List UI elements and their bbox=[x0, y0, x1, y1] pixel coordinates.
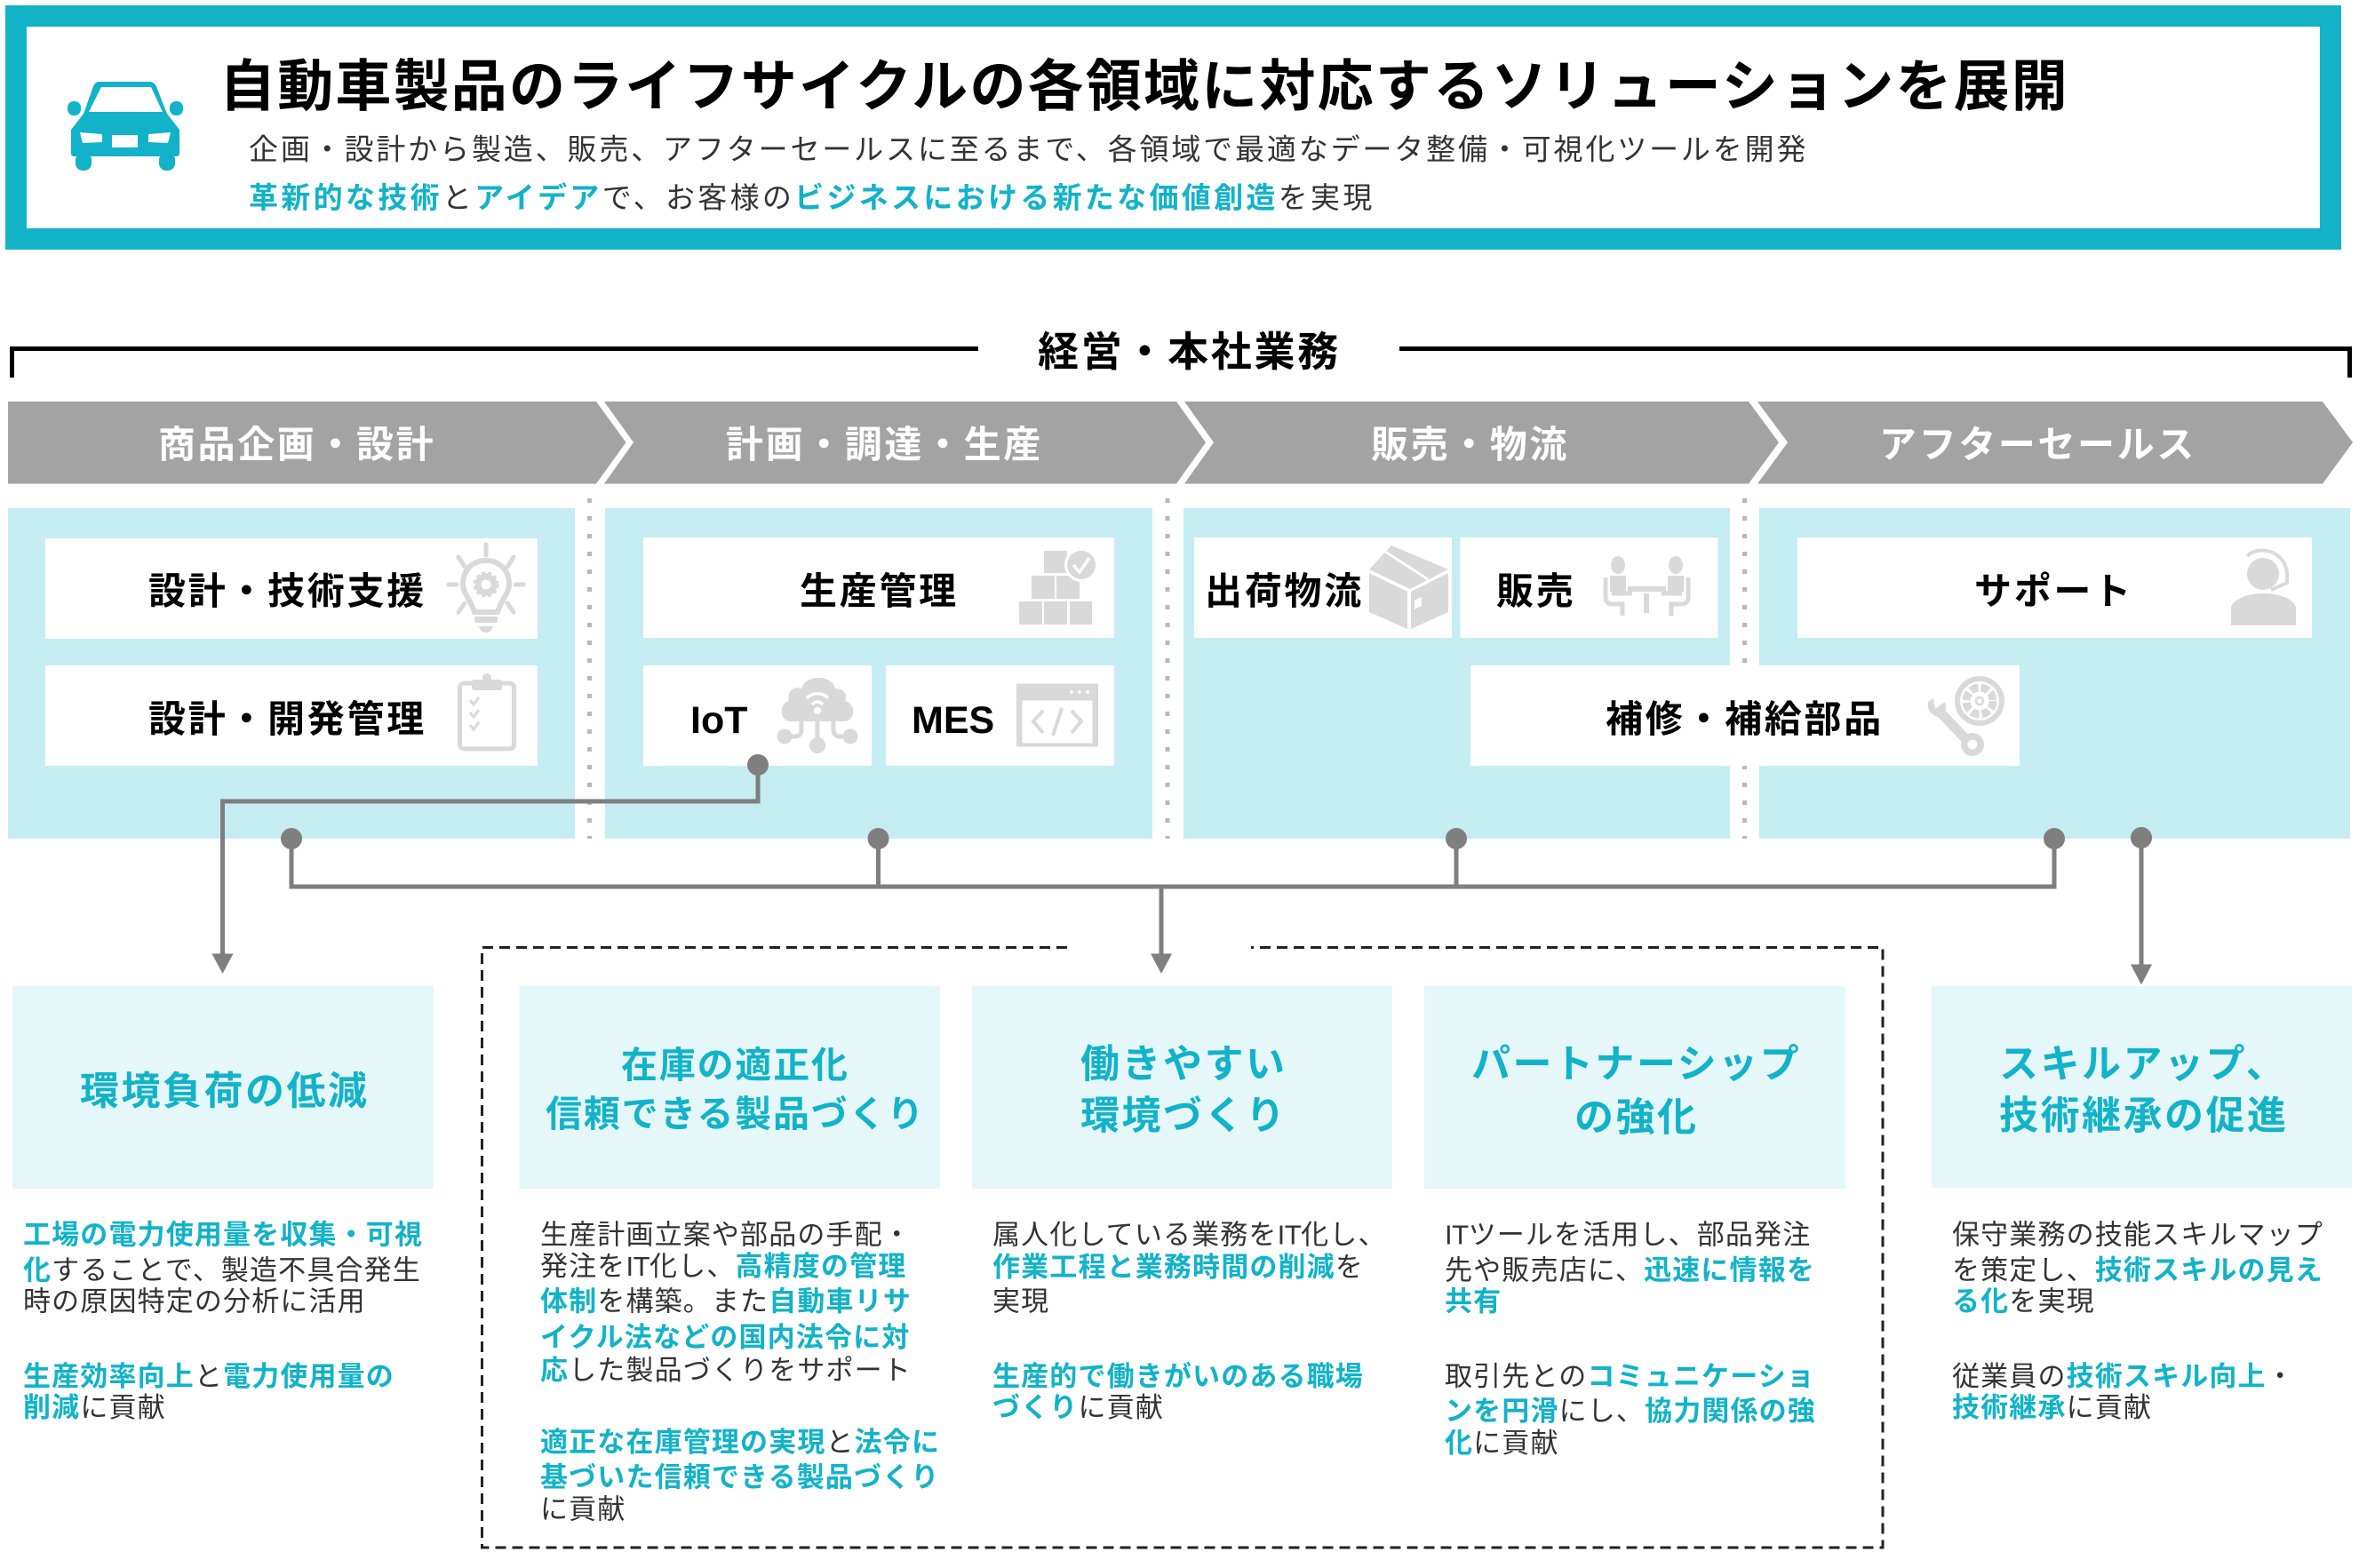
description: を策定し、技術スキルの見え bbox=[1952, 1254, 2323, 1286]
description: 技術継承に貢献 bbox=[1952, 1392, 2152, 1423]
title: 自動車製品のライフサイクルの各領域に対応するソリューションを展開 bbox=[219, 56, 2069, 118]
column: 在庫の適正化 bbox=[519, 986, 940, 1524]
icon: light bulb bbox=[449, 545, 523, 633]
arrow: 販売・物流: 販売・物流 bbox=[1371, 424, 1569, 466]
value chain arrows bbox=[8, 402, 2353, 483]
arrow: 商品企画・設計: 商品企画・設計 bbox=[158, 424, 435, 466]
goal heading box bbox=[519, 986, 940, 1189]
connector: value chain to central goals bbox=[281, 828, 2065, 974]
bracket: corporate operations: 経営・本社業務 bbox=[1038, 329, 1341, 375]
description: 保守業務の技能スキルマップ bbox=[1952, 1219, 2323, 1251]
box: 補修・補給部品: 補修・補給部品 bbox=[1606, 698, 1884, 740]
description: 実現 bbox=[992, 1286, 1049, 1317]
box: 生産管理 bbox=[643, 537, 1114, 638]
goal heading box: スキルアップ、 bbox=[1999, 1043, 2287, 1086]
description: 従業員の技術スキル向上・ bbox=[1952, 1361, 2295, 1392]
goal heading box: パートナーシップ bbox=[1471, 1043, 1801, 1086]
goal heading box: の強化 bbox=[1574, 1096, 1699, 1139]
column: 環境負荷の低減 bbox=[12, 986, 434, 1423]
connector: IoT to environment bbox=[211, 754, 769, 974]
description: 発注をIT化し、高精度の管理 bbox=[540, 1251, 906, 1282]
goal heading box bbox=[1424, 986, 1845, 1189]
icon: headset operator bbox=[2231, 551, 2296, 625]
box: 出荷物流 bbox=[1194, 537, 1452, 638]
goal heading box: 働きやすい bbox=[1080, 1043, 1287, 1086]
description bbox=[992, 1219, 1387, 1423]
icon: stacked boxes bbox=[1019, 548, 1098, 625]
description bbox=[540, 1219, 940, 1524]
icon: meeting bbox=[1606, 556, 1688, 616]
description: に貢献 bbox=[540, 1494, 626, 1524]
description: 生産計画立案や部品の手配・ bbox=[540, 1219, 912, 1251]
goal heading box: 技術継承の促進 bbox=[1999, 1094, 2289, 1137]
description bbox=[1952, 1219, 2323, 1423]
arrow: 販売・物流 bbox=[1184, 402, 1779, 483]
description: 適正な在庫管理の実現と法令に bbox=[540, 1427, 940, 1458]
box: サポート bbox=[1797, 537, 2312, 638]
description: 共有 bbox=[1445, 1286, 1502, 1317]
goal heading box: 環境負荷の低減 bbox=[80, 1070, 370, 1113]
description: 先や販売店に、迅速に情報を bbox=[1445, 1254, 1815, 1286]
goal heading box: 環境づくり bbox=[1080, 1094, 1287, 1137]
description: ンを円滑にし、協力関係の強 bbox=[1445, 1396, 1816, 1427]
box: 出荷物流: 出荷物流 bbox=[1205, 570, 1364, 612]
description bbox=[23, 1219, 423, 1423]
box: MES bbox=[886, 665, 1114, 766]
box: 販売: 販売 bbox=[1496, 570, 1575, 612]
goal heading box: 信頼できる製品づくり bbox=[546, 1094, 925, 1134]
goal heading box: 在庫の適正化 bbox=[621, 1045, 849, 1086]
panel: 販売・物流 bbox=[1184, 508, 1730, 839]
description: 削減に貢献 bbox=[23, 1392, 166, 1423]
description: 作業工程と業務時間の削減を bbox=[992, 1252, 1364, 1283]
description: 生産的で働きがいのある職場 bbox=[992, 1361, 1364, 1392]
goal heading box bbox=[12, 986, 434, 1189]
goal heading box bbox=[972, 986, 1392, 1189]
arrow: 計画・調達・生産: 計画・調達・生産 bbox=[726, 424, 1043, 466]
box: サポート: サポート bbox=[1974, 570, 2133, 612]
panel: 商品企画・設計 bbox=[8, 508, 575, 839]
description: 時の原因特定の分析に活用 bbox=[23, 1286, 366, 1317]
goal heading box bbox=[1932, 986, 2352, 1188]
box: 補修・補給部品 bbox=[1470, 665, 2020, 766]
box: 設計・開発管理 bbox=[45, 665, 538, 766]
description: 化に貢献 bbox=[1445, 1428, 1559, 1459]
connector: after-sales to skills bbox=[2131, 827, 2152, 984]
subtitle line 1: 企画・設計から製造、販売、アフターセールスに至るまで、各領域で最適なデータ整備・可視化ツールを開発 bbox=[249, 133, 1808, 165]
box: IoT: IoT bbox=[690, 699, 747, 742]
dashed group frame bbox=[482, 947, 1883, 1548]
column: 働きやすい環境づくり bbox=[972, 986, 1392, 1423]
description: づくりに貢献 bbox=[992, 1392, 1164, 1423]
description: 基づいた信頼できる製品づくり bbox=[540, 1462, 939, 1492]
column: スキルアップ、技術継承の促進 bbox=[1932, 986, 2352, 1423]
icon: clipboard bbox=[460, 673, 514, 749]
box: 設計・技術支援 bbox=[45, 538, 538, 639]
description: 生産効率向上と電力使用量の bbox=[23, 1361, 394, 1392]
icon: code window bbox=[1016, 684, 1098, 746]
arrow: 商品企画・設計 bbox=[8, 402, 626, 483]
icon: wrench and wheel bbox=[1928, 679, 2002, 756]
description: ITツールを活用し、部品発注 bbox=[1445, 1219, 1811, 1251]
subtitle line 2: 革新的な技術とアイデアで、お客様のビジネスにおける新たな価値創造を実現 bbox=[249, 181, 1375, 214]
icon: cloud network bbox=[777, 678, 858, 753]
panel: アフターセールス bbox=[1759, 508, 2350, 839]
description: 応した製品づくりをサポート bbox=[540, 1355, 912, 1386]
description: 取引先とのコミュニケーショ bbox=[1445, 1361, 1815, 1392]
panel: 計画・調達・生産 bbox=[605, 508, 1152, 839]
arrow: アフターセールス bbox=[1757, 402, 2353, 483]
box: 設計・開発管理: 設計・開発管理 bbox=[148, 698, 426, 740]
box: 販売 bbox=[1461, 537, 1718, 638]
bracket: corporate operations bbox=[12, 329, 2349, 378]
description: 体制を構築。また自動車リサ bbox=[540, 1286, 912, 1317]
description: 工場の電力使用量を収集・可視 bbox=[23, 1219, 423, 1251]
box: IoT bbox=[643, 665, 872, 766]
description: イクル法などの国内法令に対 bbox=[540, 1322, 910, 1353]
arrow: アフターセールス: アフターセールス bbox=[1879, 424, 2196, 466]
header banner bbox=[5, 5, 2341, 250]
description bbox=[1445, 1219, 1816, 1459]
icon: car bbox=[68, 82, 183, 171]
description: 化することで、製造不具合発生 bbox=[23, 1254, 421, 1286]
box: 設計・技術支援: 設計・技術支援 bbox=[148, 570, 426, 612]
arrow: 計画・調達・生産 bbox=[604, 402, 1206, 483]
icon: cardboard box bbox=[1369, 545, 1448, 629]
column: パートナーシップの強化 bbox=[1424, 986, 1845, 1459]
description: 属人化している業務をIT化し、 bbox=[992, 1219, 1387, 1251]
description: る化を実現 bbox=[1952, 1286, 2095, 1317]
box: MES: MES bbox=[912, 699, 994, 742]
box: 生産管理: 生産管理 bbox=[800, 570, 959, 612]
